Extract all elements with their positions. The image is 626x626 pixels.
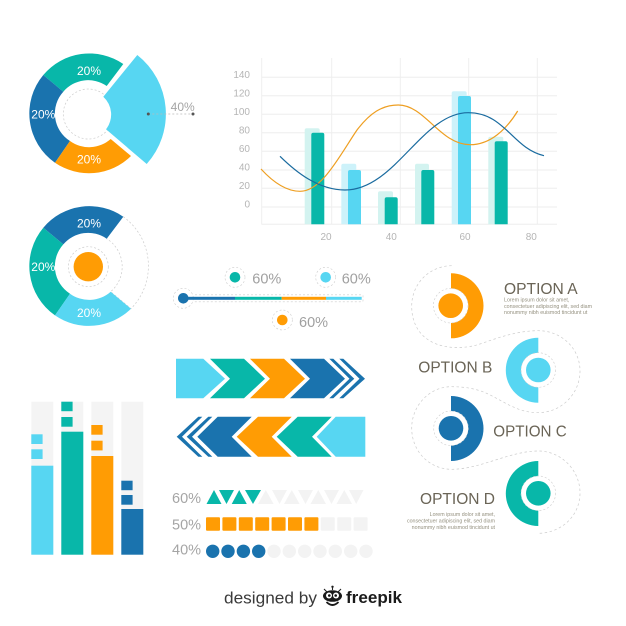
option D	[407, 461, 556, 531]
heading: OPTION C	[493, 424, 567, 441]
start marker	[173, 288, 193, 308]
pictogram row: 60% triangles	[172, 490, 364, 507]
label: left 20%: 20%	[31, 260, 56, 274]
column chart	[31, 402, 143, 555]
pictogram row: 60% triangles: 60%	[172, 491, 201, 507]
marker: orange 60%	[272, 310, 328, 331]
body text: nonummy nibh euismod tincidunt ut	[504, 310, 588, 316]
segment: orange 20%	[55, 139, 131, 173]
line segments	[186, 297, 362, 300]
segment: blue 20%	[29, 75, 70, 163]
centre dot	[68, 247, 108, 287]
callout: 40%	[147, 100, 195, 116]
pictogram row: 50% squares	[172, 517, 368, 533]
pictogram row: 50% squares: 50%	[172, 517, 201, 533]
heading: OPTION D	[420, 491, 495, 508]
icon: blue half ring	[434, 396, 484, 461]
marker: teal 60%: 60%	[252, 271, 281, 287]
x axis labels: 40	[386, 232, 397, 243]
segment: teal 20%	[29, 228, 70, 315]
option B	[418, 338, 556, 403]
body text	[504, 298, 593, 316]
y axis labels: 0	[244, 200, 250, 210]
pictogram row: 40% circles: 40%	[172, 542, 201, 558]
footer credit: freepik	[346, 588, 403, 607]
segment: teal 20%	[43, 53, 123, 92]
body text: consectetuer adipiscing elit, sed diam	[504, 304, 593, 310]
icon: orange half ring	[433, 273, 484, 338]
column: orange	[91, 402, 113, 555]
column: teal	[61, 402, 83, 555]
body text: Lorem ipsum dolor sit amet,	[430, 512, 495, 518]
column: light blue	[31, 402, 53, 555]
y axis labels	[233, 70, 250, 210]
arrow row: pointing right	[176, 359, 365, 398]
x axis labels: 20	[320, 232, 332, 243]
icon: teal half ring	[506, 461, 556, 526]
label: blue 20%: 20%	[31, 107, 56, 121]
option C	[434, 396, 567, 461]
label: teal 20%: 20%	[77, 64, 101, 78]
icon: light blue half ring	[506, 338, 556, 403]
label: bottom 20%: 20%	[77, 306, 101, 320]
progress timeline	[173, 267, 371, 331]
segment: light blue 20%	[55, 292, 131, 326]
heading: OPTION B	[418, 359, 492, 376]
x axis labels: 60	[459, 232, 471, 243]
body text: Lorem ipsum dolor sit amet,	[504, 298, 569, 304]
x axis labels: 80	[526, 232, 537, 243]
y axis labels: 40	[239, 162, 250, 174]
column: blue	[121, 402, 143, 555]
y axis labels: 80	[239, 126, 250, 136]
y axis labels: 120	[233, 88, 250, 100]
segment: light blue 40%	[103, 55, 166, 164]
y axis labels: 60	[239, 144, 250, 155]
marker: light blue 60%: 60%	[342, 271, 371, 287]
marker: orange 60%: 60%	[299, 315, 328, 331]
combo chart: bars and curves	[233, 58, 557, 243]
curve: blue	[280, 113, 544, 190]
bars	[305, 91, 508, 224]
y axis labels: 140	[233, 70, 250, 81]
dashed track	[186, 295, 363, 302]
arrow row: pointing left	[177, 417, 365, 457]
y axis labels: 100	[233, 107, 250, 118]
body text: nonummy nibh euismod tincidunt ut	[412, 525, 496, 531]
y axis labels: 20	[239, 181, 250, 192]
label: top 20%: 20%	[77, 217, 101, 231]
callout: 40%: 40%	[171, 100, 195, 114]
icon: freepik bee logo	[323, 586, 342, 605]
donut chart: open segment with orange centre	[29, 206, 148, 326]
footer credit	[224, 586, 403, 608]
body text: consectetuer adipiscing elit, sed diam	[407, 518, 496, 524]
segment: dark blue 20%	[43, 206, 123, 244]
x axis labels	[320, 232, 537, 243]
donut chart: exploded 40%	[29, 53, 195, 173]
heading: OPTION A	[504, 281, 578, 298]
option A	[433, 273, 593, 338]
pictogram row: 40% circles	[172, 542, 373, 558]
footer credit: designed by	[224, 588, 318, 608]
marker: teal 60%	[225, 267, 281, 287]
marker: light blue 60%	[316, 267, 371, 287]
body text	[407, 512, 496, 531]
label: orange 20%: 20%	[77, 153, 101, 167]
options serpentine dashed outline	[412, 266, 580, 533]
curve: orange	[261, 105, 518, 191]
